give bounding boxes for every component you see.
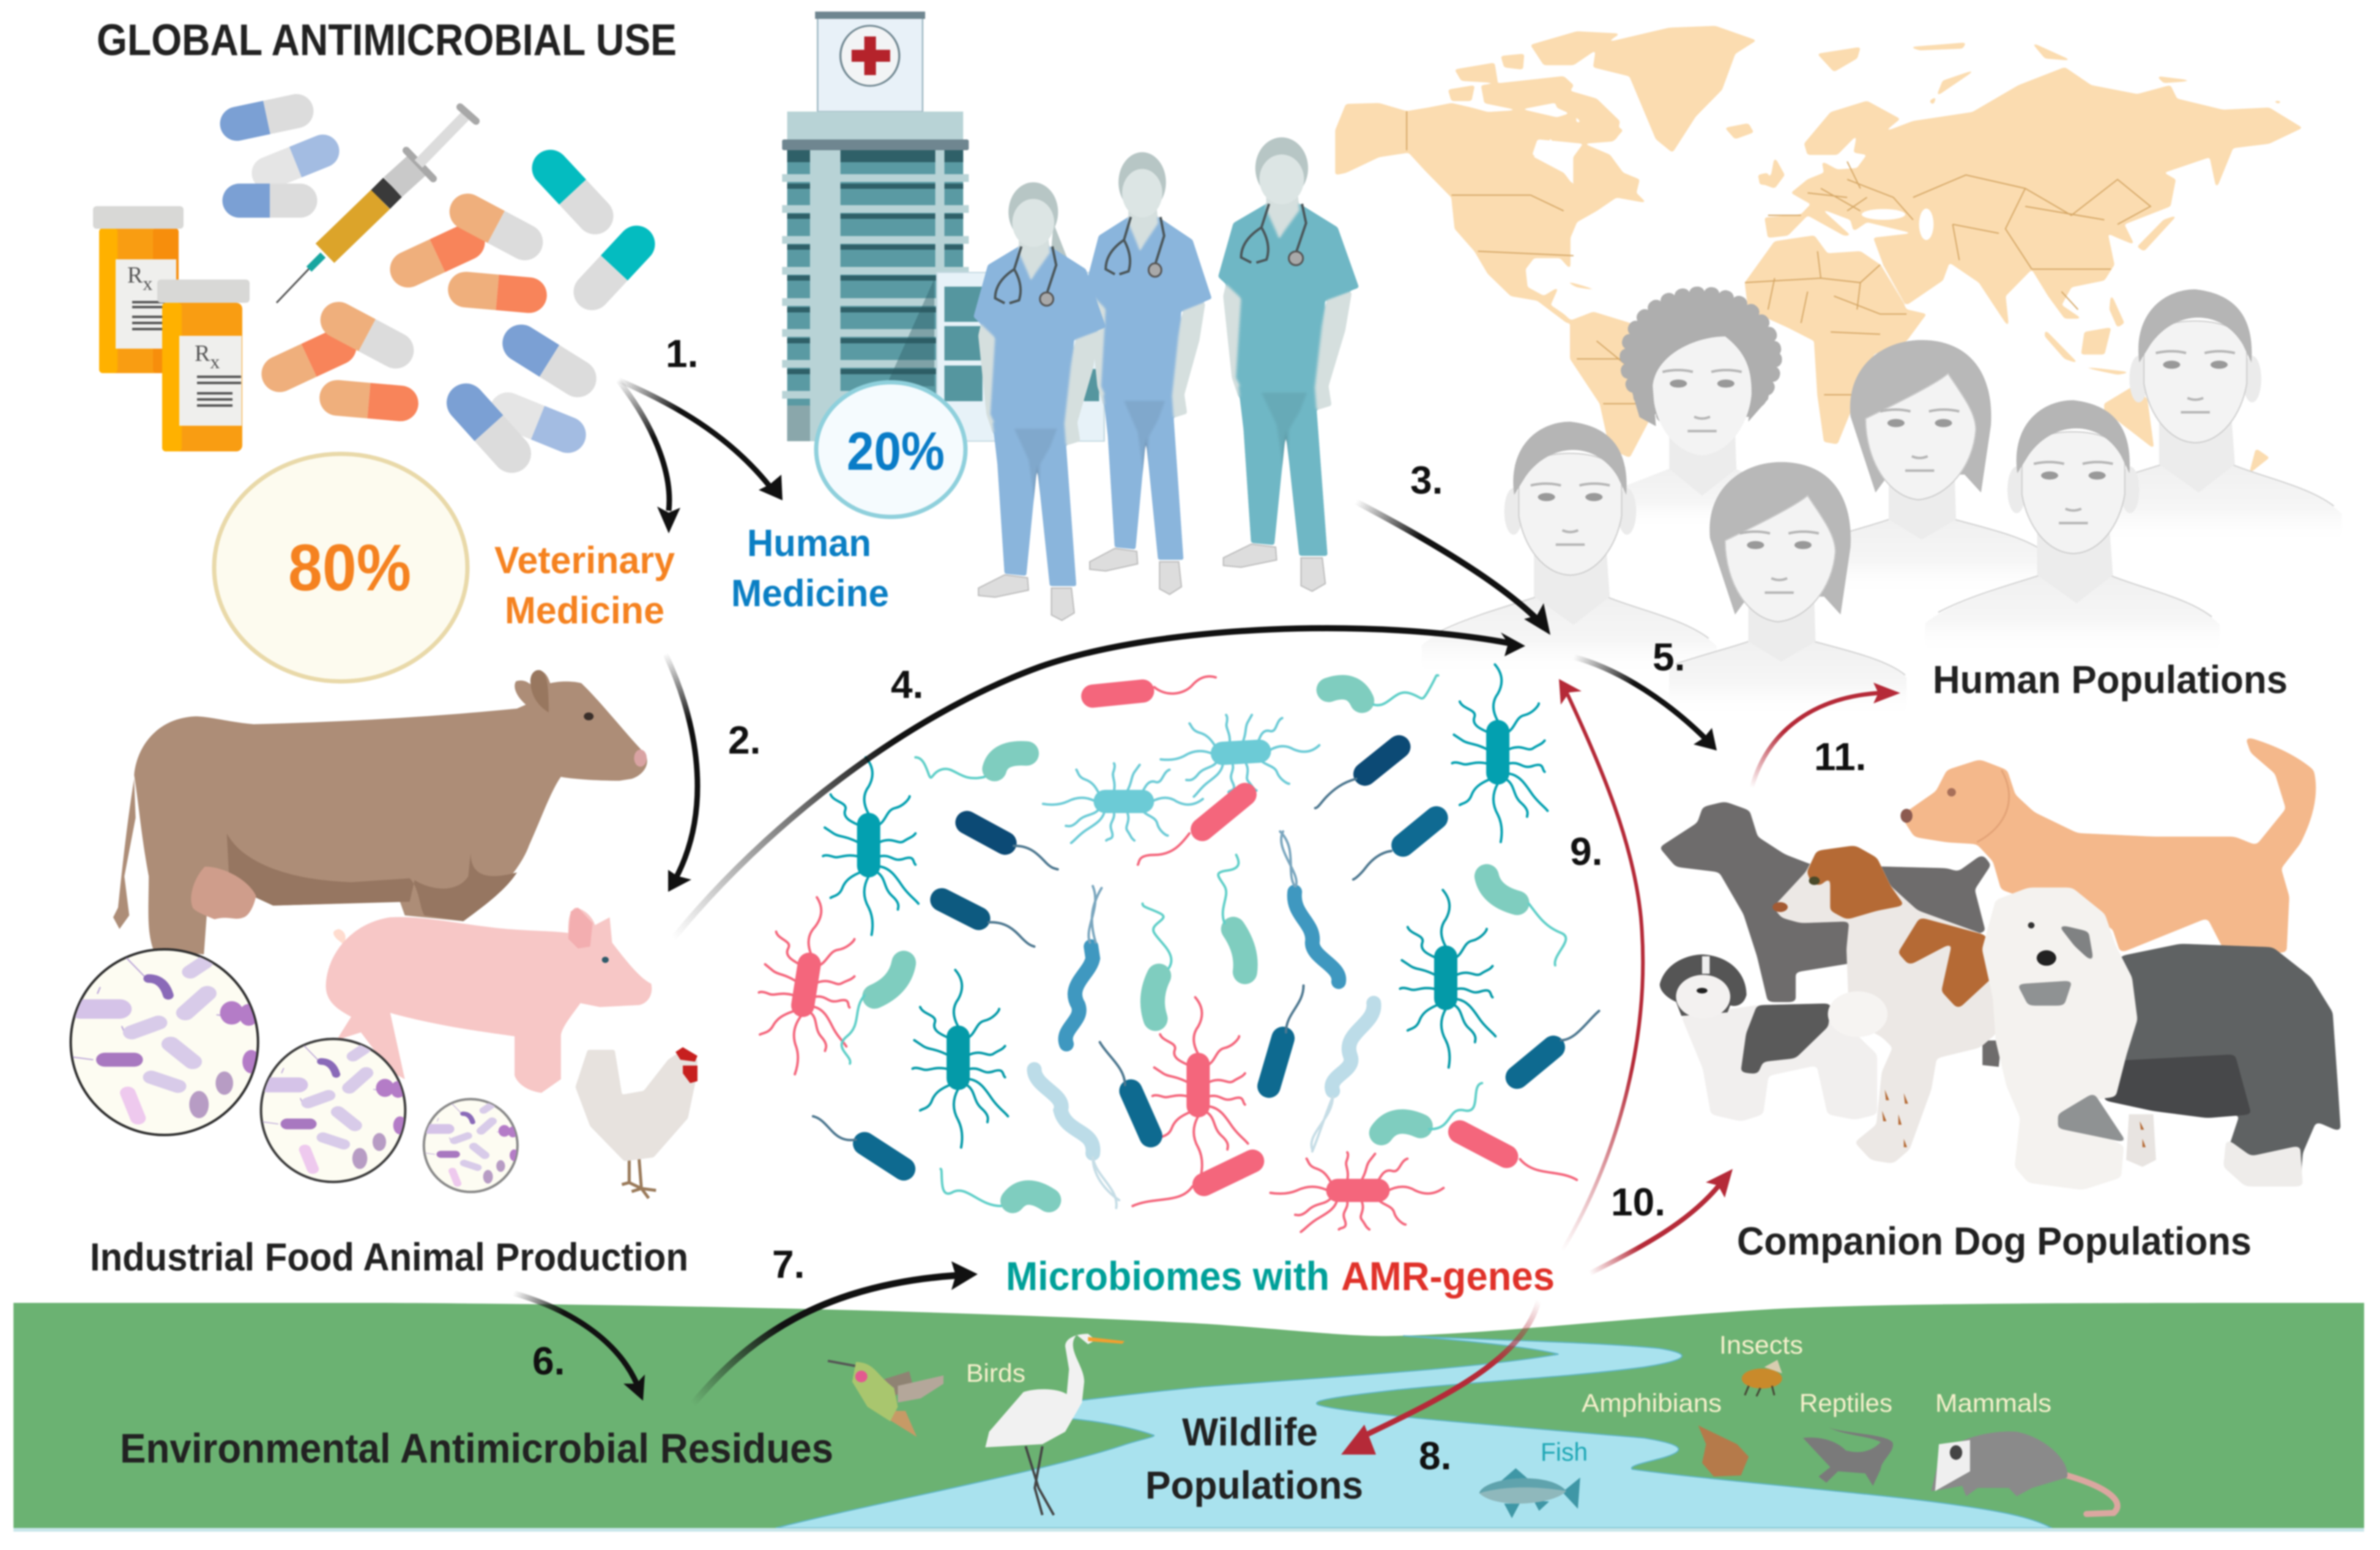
dog: old english sheepdog	[1982, 888, 2340, 1190]
step numbers: 8.	[1419, 1434, 1451, 1478]
heading: microbiomes with AMR-genes: AMR-genes	[1341, 1253, 1555, 1299]
icon: insect	[1742, 1360, 1782, 1396]
icon: pill bottles: x	[210, 350, 220, 373]
label: fish: Fish	[1541, 1437, 1588, 1466]
arrow: 6 food animals to environment	[513, 1293, 645, 1401]
label: mammals: Mammals	[1935, 1389, 2051, 1417]
icon: pill bottles: R	[127, 262, 143, 288]
icon: opossum	[1931, 1431, 2118, 1514]
nurse: teal scrubs	[1218, 137, 1359, 591]
icon: pill bottles: x	[143, 272, 152, 294]
step numbers: 10.	[1611, 1180, 1665, 1224]
illustration: human populations	[1422, 289, 2341, 718]
arrow: 4 food animals to people	[673, 628, 1525, 939]
arrow: 3 human medicine to people	[1356, 502, 1550, 635]
heading: veterinary medicine	[494, 540, 675, 632]
step numbers: 7.	[772, 1242, 805, 1286]
heading: veterinary medicine: Medicine	[505, 590, 664, 632]
heading: industrial food animal production: Industrial Food Animal Production	[90, 1235, 688, 1279]
icon: lizard	[1803, 1428, 1893, 1486]
person: man back right	[2047, 289, 2341, 544]
arrow: 8 microbiomes to wildlife	[1341, 1300, 1539, 1455]
icon: egret	[985, 1334, 1125, 1515]
dog: spotted hound	[1772, 845, 2156, 1167]
label: birds: Birds	[966, 1359, 1025, 1387]
chart: world map	[1336, 26, 2302, 473]
heading: human medicine: Human	[747, 522, 871, 565]
step numbers: 6.	[532, 1339, 565, 1383]
heading: human medicine	[731, 522, 889, 615]
dog: golden	[1900, 737, 2316, 953]
heading: wildlife populations	[1145, 1410, 1363, 1507]
arrow: 7 environment to microbiomes	[693, 1261, 978, 1404]
step numbers: 5.	[1653, 635, 1685, 679]
nurse: blue scrubs woman	[973, 182, 1106, 620]
step numbers: 1.	[666, 332, 698, 376]
callout: 20% human share: 20%	[847, 421, 945, 481]
heading: wildlife populations: Populations	[1145, 1463, 1363, 1507]
person: woman bob back	[1810, 340, 2047, 596]
icon: hummingbird	[828, 1361, 943, 1437]
arrow: 2 veterinary to food animals	[666, 654, 697, 892]
step numbers	[532, 332, 1866, 1478]
lens: large	[64, 949, 260, 1135]
heading: wildlife populations: Wildlife	[1182, 1410, 1318, 1454]
arrow: 1 to veterinary medicine	[618, 380, 680, 533]
nurse: blue scrubs man	[1085, 152, 1211, 595]
label: insects: Insects	[1719, 1330, 1803, 1359]
illustration: chicken	[576, 1047, 697, 1198]
bacteria: peritrichous group	[746, 664, 1547, 1232]
person: man front left	[1422, 421, 1717, 677]
heading: human populations: Human Populations	[1933, 658, 2288, 702]
icon: fish	[1479, 1468, 1580, 1518]
nurse: ponytail	[1051, 223, 1069, 279]
illustration: microbe lenses	[64, 949, 518, 1192]
illustration: healthcare workers	[973, 137, 1359, 620]
heading: human medicine: Medicine	[731, 573, 889, 615]
illustration: companion dogs	[1660, 737, 2340, 1190]
step numbers: 3.	[1410, 458, 1443, 502]
step numbers: 11.	[1814, 735, 1866, 779]
label: amphibians: Amphibians	[1582, 1389, 1722, 1417]
bacteria: blue rods	[813, 747, 1599, 1169]
landscape: green ground	[13, 1303, 2364, 1528]
callout: 20% human share	[816, 382, 965, 517]
illustration: pig	[326, 908, 652, 1093]
heading: environmental antimicrobial residues: Environmental Antimicrobial Residues	[120, 1425, 833, 1472]
illustration: cow	[113, 670, 647, 954]
illustration: microbiome bacteria	[746, 664, 1599, 1232]
bacteria: pink rods	[1093, 677, 1577, 1206]
bacteria: curved kidney forms	[842, 675, 1566, 1206]
icon: syringe	[277, 107, 476, 303]
arrow: 1 to human medicine	[618, 380, 783, 500]
step numbers: 9.	[1570, 829, 1602, 873]
heading: veterinary medicine: Veterinary	[494, 540, 675, 582]
arrow: 10 microbiomes to dogs	[1590, 1169, 1733, 1274]
person: man center	[1925, 400, 2220, 655]
bacteria: spirilla	[1034, 831, 1374, 1208]
dog: shih tzu	[1660, 954, 1887, 1121]
callout: 80% veterinary share	[214, 454, 467, 681]
lens: medium	[255, 1039, 407, 1182]
step numbers: 2.	[728, 718, 760, 762]
person: woman bob front	[1669, 462, 1906, 718]
landscape: river	[776, 1336, 2051, 1528]
step numbers: 4.	[891, 662, 923, 706]
person: curly hair woman	[1623, 294, 1775, 529]
callout: 80% veterinary share: 80%	[288, 530, 411, 604]
heading: companion dog populations: Companion Dog Populations	[1737, 1219, 2252, 1263]
arrow: 11 dogs to people	[1752, 683, 1900, 788]
lens: small	[420, 1099, 518, 1192]
illustration: hospital	[782, 12, 1104, 441]
arrow: 5 people to dogs	[1574, 657, 1717, 751]
icon: antibiotic capsules	[217, 91, 663, 481]
label: reptiles: Reptiles	[1799, 1389, 1892, 1417]
heading: microbiomes with AMR-genes: Microbiomes with	[1006, 1253, 1329, 1299]
landscape: shoreline strip	[13, 1528, 2364, 1532]
dog: grey	[1660, 802, 2001, 1067]
icon: pill bottles	[93, 206, 250, 451]
icon: frog	[1698, 1425, 1749, 1477]
title: global antimicrobial use: GLOBAL ANTIMICROBIAL USE	[97, 16, 677, 65]
icon: pill bottles: R	[195, 341, 210, 366]
arrow: 9 microbiomes to people	[1559, 679, 1643, 1251]
heading: microbiomes with AMR-genes	[1006, 1253, 1555, 1299]
